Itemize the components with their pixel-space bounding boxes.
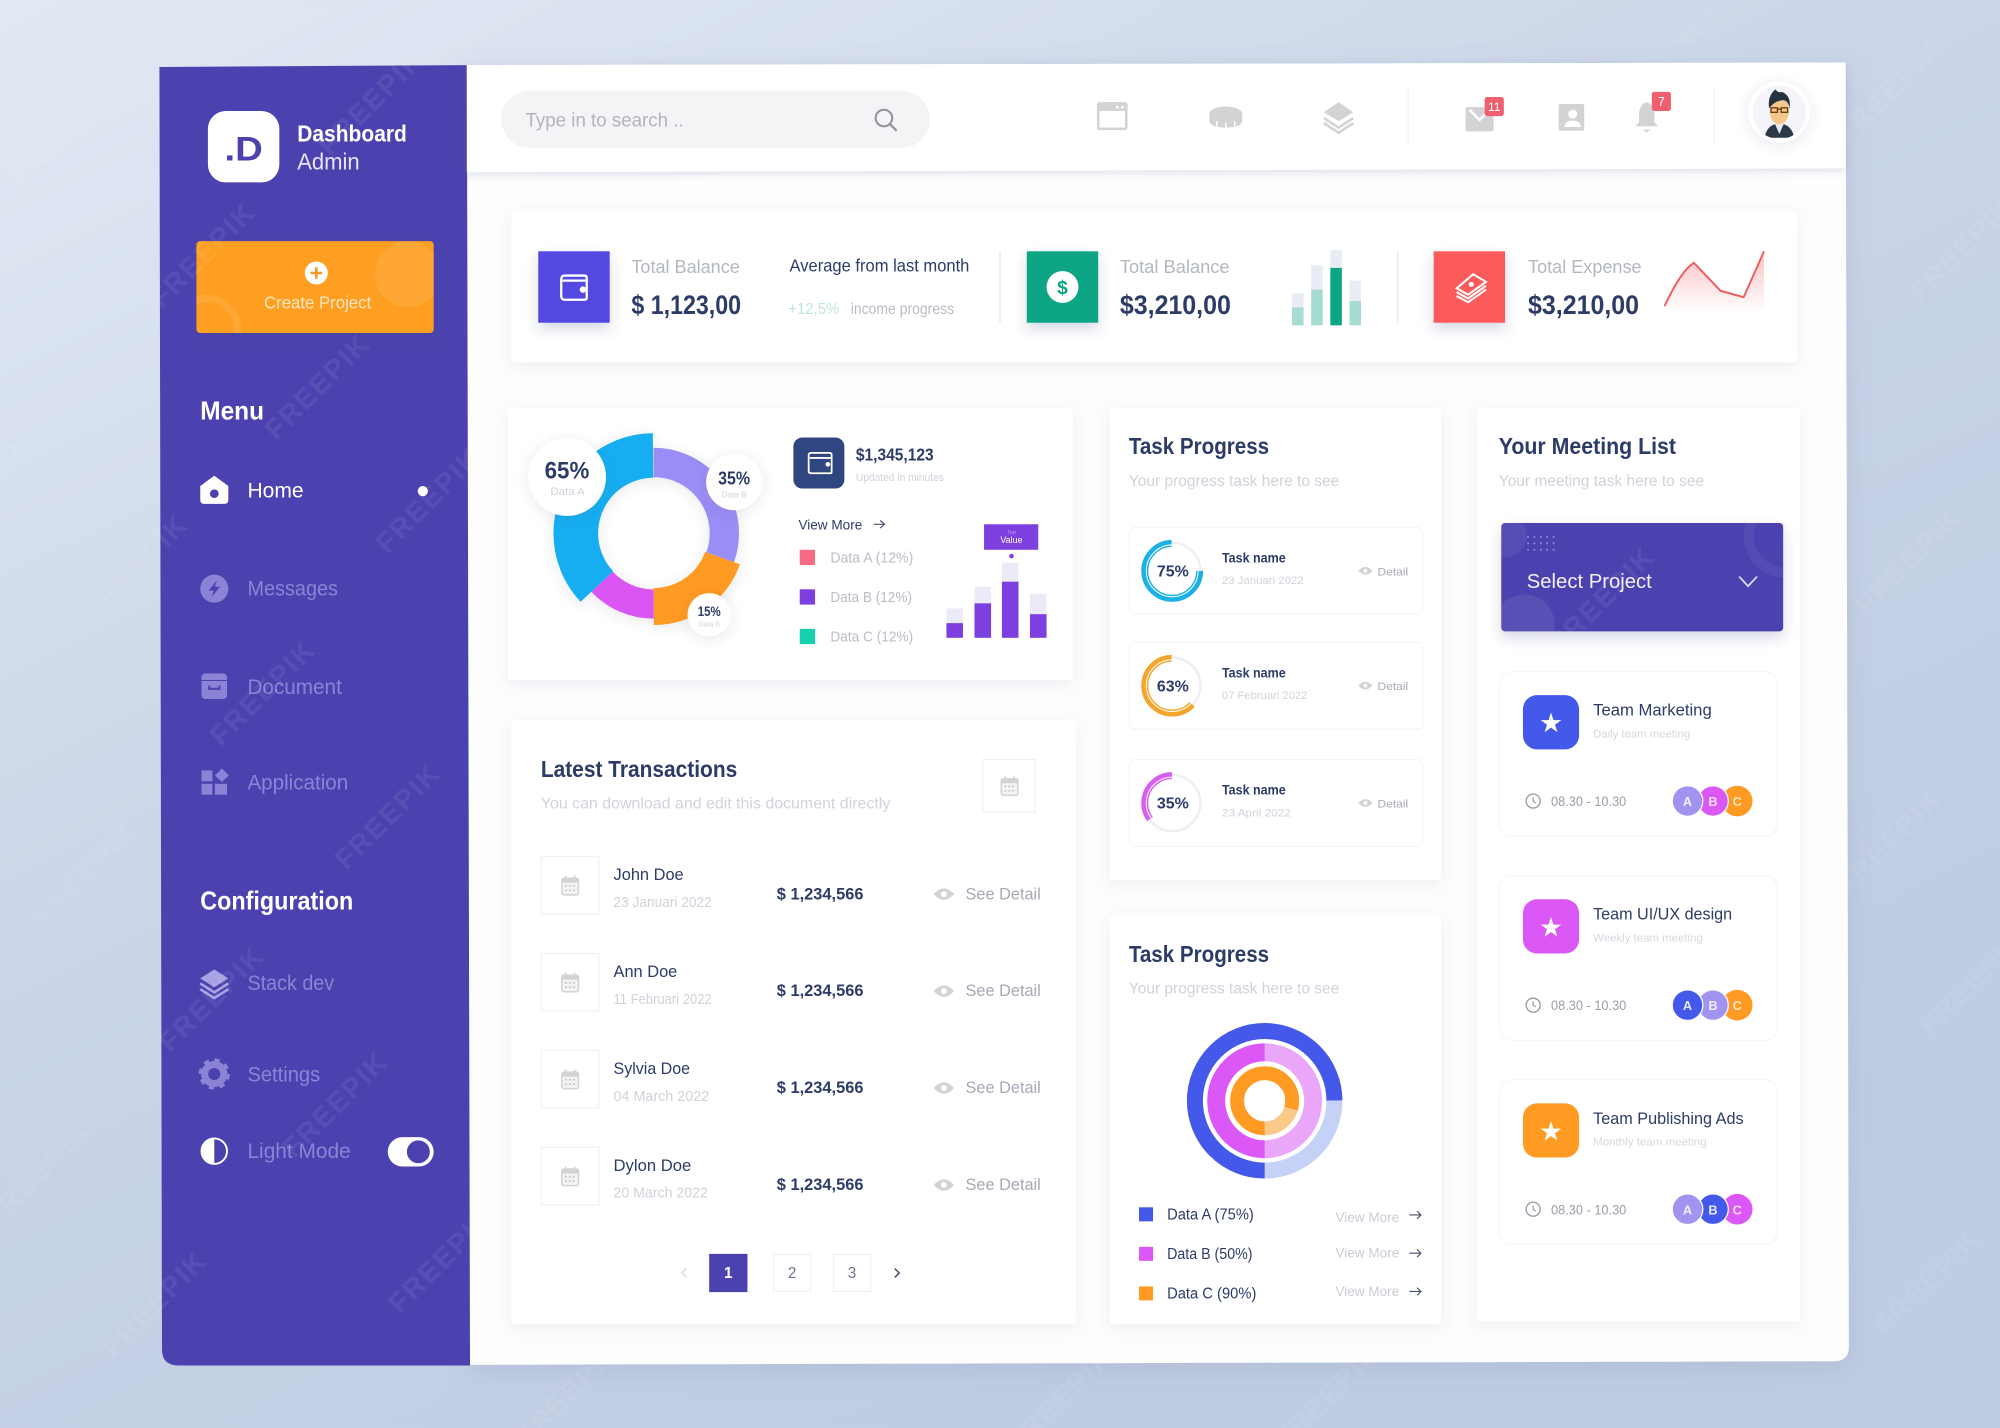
- icon: bell with badge: [1635, 92, 1671, 133]
- bubble: 35%: Data B: [721, 489, 747, 499]
- logo tile: .D: [224, 131, 263, 169]
- watermarks: FREEPIK: [76, 510, 193, 626]
- watermarks: FREEPIK: [1543, 542, 1660, 658]
- bubble: 35%: [706, 454, 762, 510]
- legend row: data B: [1139, 1245, 1421, 1263]
- row: Sylvia Doe: See Detail: [966, 1078, 1041, 1097]
- row: Ann Doe: [541, 953, 1041, 1011]
- meeting card: team publishing ads: Team Publishing Ads: [1593, 1109, 1744, 1128]
- menu item: stack dev: Stack dev: [247, 970, 334, 995]
- panel: summary stats: [511, 212, 1797, 362]
- bubble: 35%: 35%: [718, 468, 750, 489]
- icon: coin: [1209, 107, 1242, 129]
- legend: Data B (12%): [830, 590, 912, 606]
- menu item: stack dev: [200, 969, 334, 998]
- task item: 35%: 23 April 2022: [1222, 807, 1291, 819]
- tooltip: [984, 524, 1038, 558]
- legend row: data C: Data C (90%): [1167, 1286, 1256, 1303]
- heading: configuration: Configuration: [200, 887, 353, 915]
- task item: 75%: [1129, 527, 1423, 614]
- legend: [800, 550, 913, 646]
- panel: donut overview: [508, 408, 1073, 680]
- task item: 35%: 35%: [1157, 796, 1189, 813]
- meeting card: team marketing: 08.30 - 10.30: [1551, 794, 1626, 809]
- meeting card: team publishing ads: B: [1708, 1202, 1718, 1217]
- menu item: application: Application: [247, 770, 348, 795]
- icon: window: [1097, 102, 1128, 130]
- menu item: light mode: Light Mode: [247, 1138, 351, 1163]
- row: Ann Doe: 11 Februari 2022: [614, 992, 712, 1008]
- legend: Data C (12%): [830, 630, 913, 646]
- meeting card: team UI/UX design: ★: [1539, 912, 1563, 943]
- icon: contacts: [1559, 104, 1584, 131]
- meeting card: team publishing ads: 08.30 - 10.30: [1551, 1202, 1626, 1217]
- panel: latest transactions: [511, 721, 1077, 1324]
- icon: layers: [1324, 102, 1353, 133]
- bar chart: data: [946, 563, 1047, 638]
- heading: Task Progress: [1129, 433, 1269, 459]
- stat: average from last month: +12,5%: [788, 301, 840, 318]
- stat: total balance dollar: Total Balance: [1120, 256, 1230, 277]
- stat: total expense: $3,210,00: [1528, 290, 1639, 320]
- meeting card: team UI/UX design: Weekly team meeting: [1593, 932, 1703, 944]
- menu item: light mode: [201, 1138, 351, 1165]
- row: Sylvia Doe: [541, 1050, 1041, 1108]
- row: John Doe: [541, 857, 1041, 914]
- stat: average from last month: [788, 256, 969, 318]
- task item: 35%: Detail: [1378, 798, 1408, 810]
- meeting card: team publishing ads: ★: [1539, 1116, 1563, 1147]
- meeting card: team publishing ads: Monthly team meeting: [1593, 1136, 1707, 1148]
- pagination: [682, 1254, 899, 1292]
- link: view more: View More: [798, 516, 862, 532]
- row: John Doe: John Doe: [614, 865, 684, 884]
- meeting card: team marketing: [1499, 672, 1777, 836]
- subheading: Your meeting task here to see: [1499, 473, 1704, 490]
- meeting card: team UI/UX design: 08.30 - 10.30: [1551, 998, 1626, 1013]
- stat: average from last month: Average from last month: [790, 256, 969, 276]
- watermarks: FREEPIK: [153, 941, 269, 1058]
- task item: 35%: Task name: [1222, 783, 1286, 798]
- icon: wallet tile: [793, 438, 844, 489]
- pagination: 3: [848, 1265, 856, 1282]
- watermarks: FREEPIK: [329, 759, 445, 875]
- stat: total expense: [1434, 251, 1642, 323]
- meeting card: team publishing ads: [1499, 1080, 1777, 1244]
- heading: Latest Transactions: [541, 756, 737, 782]
- watermarks: FREEPIK: [1830, 784, 1947, 901]
- task item: 63%: Task name: [1222, 665, 1286, 680]
- menu item: settings: [200, 1060, 320, 1088]
- button: create project: [196, 241, 434, 333]
- meeting card: team UI/UX design: B: [1708, 998, 1718, 1013]
- task item: 63%: [1129, 642, 1423, 729]
- panel: main content surface: [467, 63, 1849, 1365]
- heading: Your Meeting List: [1499, 433, 1676, 459]
- legend row: data A: View More: [1335, 1209, 1399, 1225]
- icon: mail with badge: 11: [1488, 100, 1501, 114]
- meeting card: team UI/UX design: C: [1733, 998, 1742, 1013]
- row: Sylvia Doe: $ 1,234,566: [777, 1078, 864, 1097]
- row: John Doe: $ 1,234,566: [777, 884, 864, 903]
- meeting card: team UI/UX design: A: [1683, 998, 1692, 1013]
- watermarks: FREEPIK: [1868, 1224, 1985, 1341]
- button: calendar: [983, 760, 1035, 812]
- menu item: messages: Messages: [247, 576, 338, 601]
- watermarks: FREEPIK: [259, 329, 375, 445]
- stat: total balance dollar: $3,210,00: [1120, 290, 1231, 320]
- menu item: document: Document: [247, 674, 342, 699]
- bubble: 65%: Data A: [550, 486, 585, 498]
- watermarks: FREEPIK: [276, 1047, 393, 1163]
- row: Dylon Doe: Dylon Doe: [614, 1156, 691, 1175]
- legend row: data A: [1139, 1206, 1421, 1225]
- meeting card: team publishing ads: C: [1733, 1202, 1742, 1217]
- task item: 63%: 07 Februari 2022: [1222, 690, 1307, 702]
- watermarks: FREEPIK: [25, 816, 142, 933]
- row: John Doe: 23 Januari 2022: [614, 895, 712, 911]
- bubble: 65%: [528, 438, 606, 516]
- row: Dylon Doe: [541, 1147, 1041, 1205]
- meeting card: team marketing: Team Marketing: [1593, 701, 1712, 720]
- bubble: 15%: Data B: [698, 621, 720, 628]
- task item: 75%: Detail: [1378, 566, 1408, 578]
- meeting card: team marketing: B: [1708, 794, 1718, 809]
- meeting card: team UI/UX design: Team UI/UX design: [1593, 905, 1732, 924]
- meeting card: team marketing: ★: [1539, 708, 1563, 739]
- panel: task progress list: [1110, 408, 1441, 880]
- dropdown: select project: [1495, 523, 1789, 644]
- meeting card: team publishing ads: A: [1683, 1202, 1692, 1217]
- subheading: You can download and edit this document directly: [541, 796, 890, 813]
- meeting card: team marketing: C: [1733, 794, 1742, 809]
- tooltip: Top: [1007, 530, 1016, 536]
- legend: Data A (12%): [830, 551, 913, 567]
- task item: 75%: 23 Januari 2022: [1222, 575, 1304, 587]
- meeting card: team marketing: Daily team meeting: [1593, 728, 1690, 740]
- subheading: Your progress task here to see: [1129, 981, 1339, 998]
- panel: task progress radial: [1110, 916, 1441, 1324]
- watermarks: FREEPIK: [1830, 34, 1947, 151]
- toggle: [388, 1137, 434, 1166]
- line chart: expense: [1665, 251, 1764, 313]
- heading: menu: Menu: [200, 398, 264, 426]
- panel: header bar: [467, 63, 1846, 172]
- bubble: 65%: 65%: [545, 457, 589, 484]
- task item: 35%: [1129, 760, 1423, 846]
- button: create project: Create Project: [264, 293, 371, 313]
- watermarks: FREEPIK: [6, 76, 123, 193]
- row: Ann Doe: $ 1,234,566: [777, 981, 864, 1000]
- legend row: data C: [1139, 1283, 1421, 1303]
- row: John Doe: See Detail: [966, 884, 1041, 903]
- menu item: messages: [200, 575, 338, 603]
- watermarks: FREEPIK: [204, 635, 320, 751]
- row: Dylon Doe: 20 March 2022: [614, 1186, 708, 1202]
- stat: average from last month: income progress: [851, 301, 954, 318]
- subheading: Your progress task here to see: [1129, 473, 1339, 490]
- amount: [856, 444, 944, 484]
- brand name: Dashboard: [297, 121, 407, 147]
- stat: total balance dollar: [1027, 251, 1231, 323]
- row: Dylon Doe: See Detail: [966, 1175, 1041, 1194]
- row: Ann Doe: See Detail: [966, 981, 1041, 1000]
- search box: Type in to search ..: [526, 110, 684, 131]
- legend row: data A: Data A (75%): [1167, 1206, 1254, 1223]
- search box: [501, 91, 930, 148]
- legend row: data B: Data B (50%): [1167, 1246, 1253, 1263]
- watermarks: FREEPIK: [382, 1202, 499, 1319]
- stat: total expense: Total Expense: [1528, 256, 1642, 277]
- icon: bell with badge: 7: [1658, 94, 1665, 109]
- bar chart: balance: [1292, 250, 1361, 325]
- bubble: 15%: [688, 593, 731, 637]
- tooltip: Value: [1000, 535, 1023, 545]
- meeting card: team UI/UX design: [1499, 876, 1777, 1040]
- stat: total balance dollar: $: [1057, 278, 1068, 299]
- watermarks: FREEPIK: [1849, 503, 1966, 620]
- logo tile: [208, 111, 279, 182]
- divider: [1408, 87, 1714, 145]
- dropdown: select project: Select Project: [1527, 571, 1652, 593]
- amount: Updated in minutes: [856, 472, 944, 484]
- task item: 75%: Task name: [1222, 551, 1286, 566]
- stat: total balance wallet: [538, 251, 741, 323]
- pagination: 2: [788, 1265, 796, 1282]
- brand name: Admin: [297, 149, 360, 175]
- brand name: [297, 121, 407, 175]
- stat: total balance wallet: $ 1,123,00: [631, 290, 741, 320]
- meeting card: team marketing: A: [1683, 794, 1692, 809]
- task item: 75%: 75%: [1157, 564, 1189, 581]
- row: Sylvia Doe: 04 March 2022: [614, 1089, 709, 1105]
- pagination: 1: [724, 1265, 733, 1282]
- task item: 63%: 63%: [1157, 678, 1189, 695]
- watermarks: FREEPIK: [369, 442, 486, 559]
- row: Dylon Doe: $ 1,234,566: [777, 1175, 864, 1194]
- heading: Task Progress: [1129, 941, 1269, 967]
- radial chart: [1195, 1031, 1334, 1171]
- avatar: [1749, 82, 1810, 143]
- watermarks: FREEPIK: [144, 197, 260, 314]
- task item: 63%: Detail: [1378, 681, 1408, 693]
- watermarks: FREEPIK: [95, 1246, 212, 1362]
- divider: [1000, 251, 1398, 323]
- row: Sylvia Doe: Sylvia Doe: [614, 1059, 690, 1078]
- bubble: 15%: 15%: [698, 604, 721, 619]
- donut chart: [576, 455, 731, 611]
- panel: meeting list: [1477, 408, 1823, 1321]
- legend row: data B: View More: [1335, 1245, 1399, 1261]
- icon: mail with badge: [1466, 97, 1504, 131]
- row: Ann Doe: Ann Doe: [614, 962, 677, 981]
- menu item: document: [202, 674, 342, 699]
- legend row: data C: View More: [1335, 1283, 1399, 1299]
- watermarks: FREEPIK: [312, 44, 429, 161]
- menu item: settings: Settings: [247, 1062, 320, 1087]
- menu item: application: [202, 769, 348, 795]
- panel: sidebar: [159, 65, 470, 1365]
- menu item: home: [200, 476, 428, 504]
- amount: $1,345,123: [856, 444, 934, 464]
- menu item: home: Home: [247, 477, 304, 502]
- stat: total balance wallet: Total Balance: [631, 256, 740, 277]
